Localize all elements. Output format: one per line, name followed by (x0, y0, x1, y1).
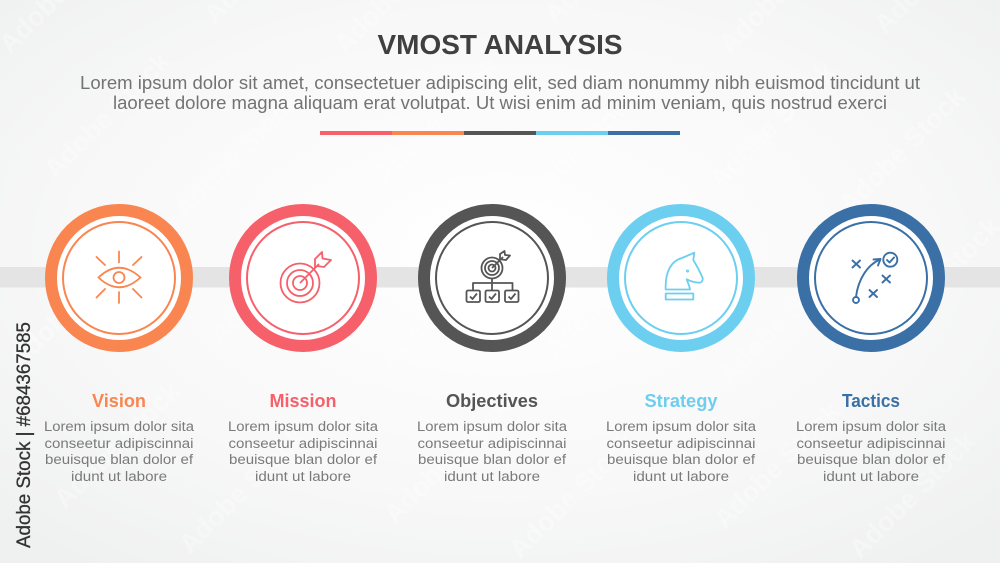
text: Adobe Stock (3, 236, 142, 374)
heading: strategy: Strategy (644, 391, 718, 411)
icon: chess knight (666, 253, 703, 300)
text: Adobe Stock (843, 426, 982, 563)
text: Adobe Stock (538, 226, 677, 364)
text: objectives description (417, 419, 568, 484)
description text block (80, 73, 920, 113)
text: Adobe Stock (168, 86, 307, 224)
text: strategy description: beuisque blan dolor ef (607, 452, 755, 467)
panel: objectives (417, 210, 568, 484)
text: tactics description: beuisque blan dolor ef (797, 452, 945, 467)
text: strategy description: Lorem ipsum dolor sita (606, 419, 757, 434)
text: objectives description: beuisque blan dolor ef (418, 452, 566, 467)
text: Adobe Stock (173, 421, 312, 559)
panel: tactics (796, 210, 947, 484)
panel: mission (228, 210, 379, 484)
text: Adobe Stock (708, 396, 847, 534)
text: Adobe Stock (508, 81, 647, 219)
icon: eye (96, 252, 142, 303)
text: mission description: conseetur adipiscinnai (228, 436, 378, 451)
panel: vision (44, 210, 195, 484)
text: strategy description: conseetur adipiscinnai (606, 436, 756, 451)
icon: target over hierarchy of checked boxes (466, 251, 518, 302)
description text block: Lorem ipsum dolor sit amet, consectetuer adipiscing elit, sed diam nonummy nibh euismod tincidunt ut (80, 73, 920, 93)
heading: objectives: Objectives (446, 391, 538, 411)
text: tactics description (796, 419, 947, 484)
text: vision description (44, 419, 195, 484)
text: Adobe Stock (503, 426, 642, 563)
text: vision description: beuisque blan dolor ef (45, 452, 193, 467)
horizontal connector band (0, 267, 1000, 288)
text: vision description: idunt ut labore (71, 469, 167, 484)
text: objectives description: conseetur adipiscinnai (418, 436, 566, 451)
text: mission description: beuisque blan dolor ef (229, 452, 377, 467)
text: mission description: idunt ut labore (255, 469, 351, 484)
text: Adobe Stock (713, 251, 852, 389)
heading: tactics: Tactics (842, 391, 900, 411)
text: Adobe Stock (48, 376, 187, 514)
text: mission description (228, 419, 379, 484)
text: tactics description: Lorem ipsum dolor sita (796, 419, 947, 434)
stock id side label: Adobe Stock | #684367585 (14, 322, 35, 548)
text: tactics description: conseetur adipiscinnai (796, 436, 946, 451)
text: mission description: Lorem ipsum dolor sita (228, 419, 379, 434)
heading: vision: Vision (92, 391, 146, 411)
colour divider bar (320, 131, 680, 135)
icon: target with arrow (280, 252, 331, 302)
text: Adobe Stock (833, 81, 972, 219)
text: vision description: Lorem ipsum dolor sita (44, 419, 195, 434)
text: objectives description: idunt ut labore (444, 469, 540, 484)
text: Adobe Stock (703, 56, 842, 194)
text: tactics description: idunt ut labore (823, 469, 919, 484)
text: Adobe Stock (203, 211, 342, 349)
text: Adobe Stock (373, 236, 512, 374)
text: strategy description (606, 419, 757, 484)
description text block: laoreet dolore magna aliquam erat volutpat. Ut wisi enim ad minim veniam, quis nostrud exerci (113, 93, 887, 113)
text: Adobe Stock (38, 46, 177, 184)
text: strategy description: idunt ut labore (633, 469, 729, 484)
text: Adobe Stock (368, 51, 507, 189)
text: objectives description: Lorem ipsum dolor sita (417, 419, 568, 434)
icon: play diagram (852, 253, 897, 303)
text: vision description: conseetur adipiscinnai (44, 436, 194, 451)
heading: mission: Mission (270, 391, 336, 411)
text: Adobe Stock (378, 391, 517, 529)
panel: strategy (606, 210, 757, 484)
title: VMOST ANALYSIS (378, 29, 622, 60)
